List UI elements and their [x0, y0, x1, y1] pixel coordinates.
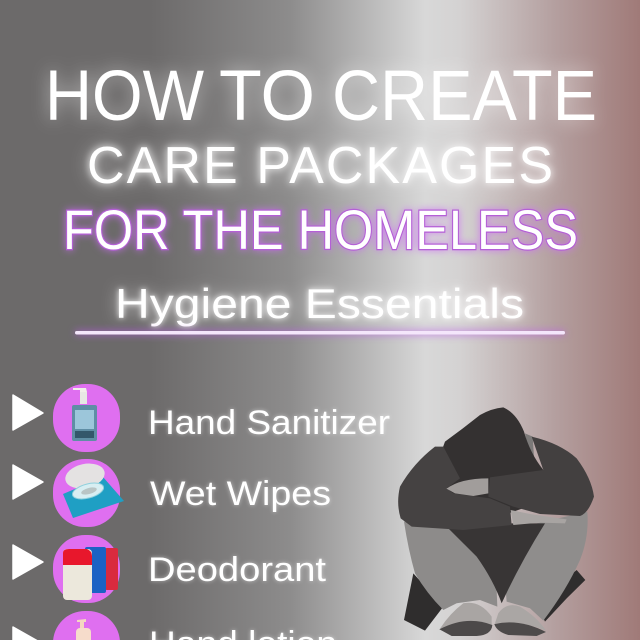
- arrow: hand sanitizer: [13, 395, 43, 430]
- left arm sleeve: [398, 447, 512, 530]
- photo: hooded person sitting with head on knees: [398, 407, 594, 636]
- underline rule: [75, 331, 565, 334]
- title: how to create: TO: [219, 57, 315, 136]
- icon: wet wipes pack: [53, 459, 124, 527]
- arrow: wet wipes: [13, 465, 43, 499]
- list item: deodorant: [13, 535, 327, 603]
- title: how to create: [45, 57, 597, 136]
- heading: care packages: CARE PACKAGES: [87, 137, 553, 195]
- list item: wet wipes: [13, 459, 331, 527]
- icon: hand lotion bottle: [53, 611, 120, 640]
- torso and hood: [433, 407, 547, 523]
- icon: hand sanitizer bottle: [53, 384, 120, 452]
- label: deodorant: Deodorant: [148, 551, 327, 589]
- icon: deodorant sticks: [53, 535, 120, 603]
- undershirt strip: [525, 433, 534, 457]
- shadow between legs: [443, 523, 545, 603]
- arrow: deodorant: [13, 545, 43, 579]
- cloak behind legs: [404, 570, 585, 631]
- hand on elbow: [447, 478, 488, 496]
- right arm sleeve: [488, 437, 594, 516]
- arrow: hand lotion: [13, 627, 43, 640]
- label: wet wipes: Wet Wipes: [150, 475, 331, 513]
- heading: for the homeless: FOR THE HOMELESS: [63, 198, 578, 261]
- title: how to create: CREATE: [332, 57, 597, 136]
- right leg: [506, 512, 588, 621]
- subheading: hygiene essentials: Hygiene Essentials: [115, 280, 524, 327]
- hand on knee: [511, 510, 567, 525]
- list item: hand lotion: [13, 611, 337, 640]
- left leg: [404, 522, 497, 610]
- list item: hand sanitizer: [13, 384, 390, 452]
- label: hand sanitizer: Hand Sanitizer: [148, 404, 390, 442]
- feet and sandals: [439, 603, 546, 636]
- title: how to create: HOW: [45, 57, 204, 136]
